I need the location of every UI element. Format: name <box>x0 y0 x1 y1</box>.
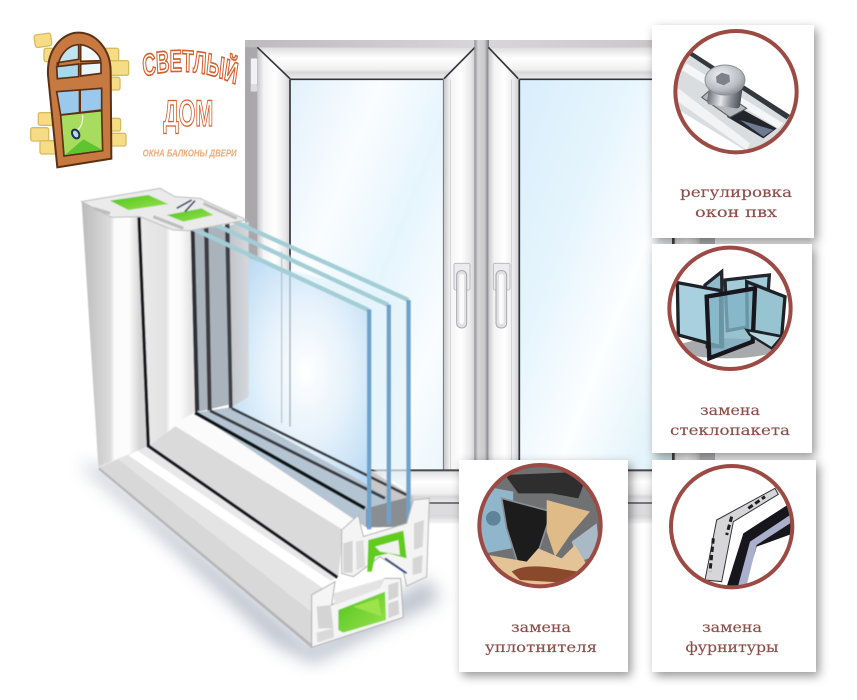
outer frame vertical face <box>82 202 148 467</box>
icon: glass units <box>667 247 793 370</box>
caption: окон пвх <box>695 205 777 221</box>
right sash <box>488 47 700 473</box>
window soft shadow below <box>380 505 720 519</box>
icon: adjustment bolt <box>673 30 800 153</box>
caption: замена <box>702 620 762 636</box>
central mullion <box>474 40 489 513</box>
sash section end <box>342 498 429 586</box>
bottom rail <box>245 469 715 515</box>
caption: стеклопакета <box>670 423 790 439</box>
right handle <box>493 263 510 328</box>
outer frame <box>245 40 715 513</box>
top section of profile <box>82 188 247 231</box>
logo text: Дом: ДОМ <box>163 92 213 134</box>
caption: замена <box>511 620 571 636</box>
ring <box>479 465 601 586</box>
window background <box>245 40 720 519</box>
caption: уплотнителя <box>485 640 597 656</box>
black gasket line <box>139 217 337 577</box>
triple glazing panes <box>190 217 411 529</box>
caption <box>680 185 792 221</box>
logo <box>30 32 239 168</box>
icon: window hardware <box>670 465 793 588</box>
hinge <box>251 58 257 92</box>
logo text: tagline: ОКНА БАЛКОНЫ ДВЕРИ <box>143 149 237 160</box>
card: замена стеклопакета <box>652 244 812 453</box>
caption <box>485 620 597 656</box>
sash lower face <box>148 412 366 577</box>
card: замена уплотнителя <box>459 460 628 672</box>
icon: rubber seals <box>477 463 603 590</box>
caption <box>686 620 778 656</box>
caption: регулировка <box>680 185 792 201</box>
ring <box>675 31 797 152</box>
card: регулировка окон пвх <box>652 25 814 238</box>
sash vertical face <box>140 217 195 446</box>
ring <box>669 248 791 369</box>
ring <box>671 466 792 587</box>
caption: замена <box>700 403 760 419</box>
window profile cross-section <box>80 188 440 663</box>
logo text: Светлый: СВЕТЛЫЙ <box>142 49 239 85</box>
glass cavity <box>191 222 413 527</box>
icon: window with bricks <box>31 33 129 167</box>
outer frame section end <box>312 578 403 647</box>
left sash <box>257 47 475 473</box>
card: замена фурнитуры <box>652 460 816 672</box>
cast shadow <box>80 463 440 663</box>
caption <box>670 403 790 439</box>
outer frame lower face <box>98 446 337 648</box>
caption: фурнитуры <box>686 640 778 656</box>
left handle <box>454 263 470 328</box>
